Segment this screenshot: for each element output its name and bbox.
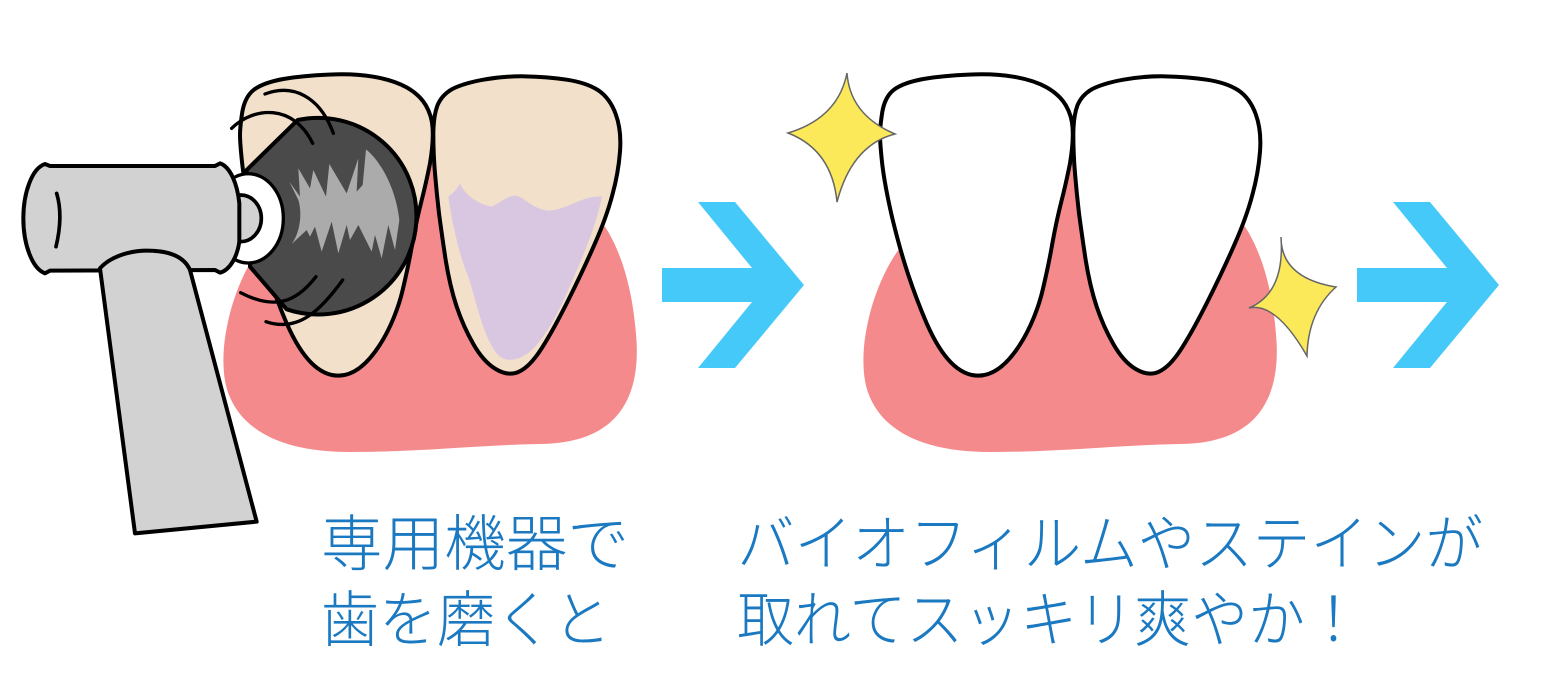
stain: biofilm [448, 183, 602, 360]
barrel mark [56, 193, 60, 247]
inner shaft [220, 195, 261, 242]
gum: left [223, 160, 637, 452]
caption line 2: 歯を磨くと [321, 586, 611, 654]
hairs [232, 90, 343, 324]
white collar [213, 174, 283, 263]
icon: dental polishing handpiece [23, 90, 416, 533]
icon: sparkle upper [788, 73, 895, 202]
teeth and gum: before [223, 74, 637, 452]
caption: left [321, 510, 629, 654]
arrow: first [662, 202, 804, 368]
barrel [23, 163, 239, 273]
tooth: right with stain [433, 76, 620, 374]
handle [100, 251, 257, 533]
tooth: left clean [880, 74, 1073, 376]
arrow: second [1357, 202, 1499, 368]
panel: before cleaning teeth [23, 74, 637, 533]
panel: after cleaning teeth [788, 73, 1336, 452]
caption line 1: バイオフィルムやステインが [737, 510, 1483, 578]
icon: sparkle lower [1249, 237, 1336, 356]
bristles [289, 149, 399, 258]
tooth: right clean [1073, 76, 1260, 374]
teeth and gum: after [863, 74, 1277, 452]
gum: right [863, 160, 1277, 452]
polishing head [247, 118, 416, 315]
caption: right [737, 510, 1483, 654]
tooth: left stained [240, 74, 433, 376]
caption line 2: 取れてスッキリ爽やか！ [737, 586, 1362, 654]
caption line 1: 専用機器で [321, 510, 629, 578]
